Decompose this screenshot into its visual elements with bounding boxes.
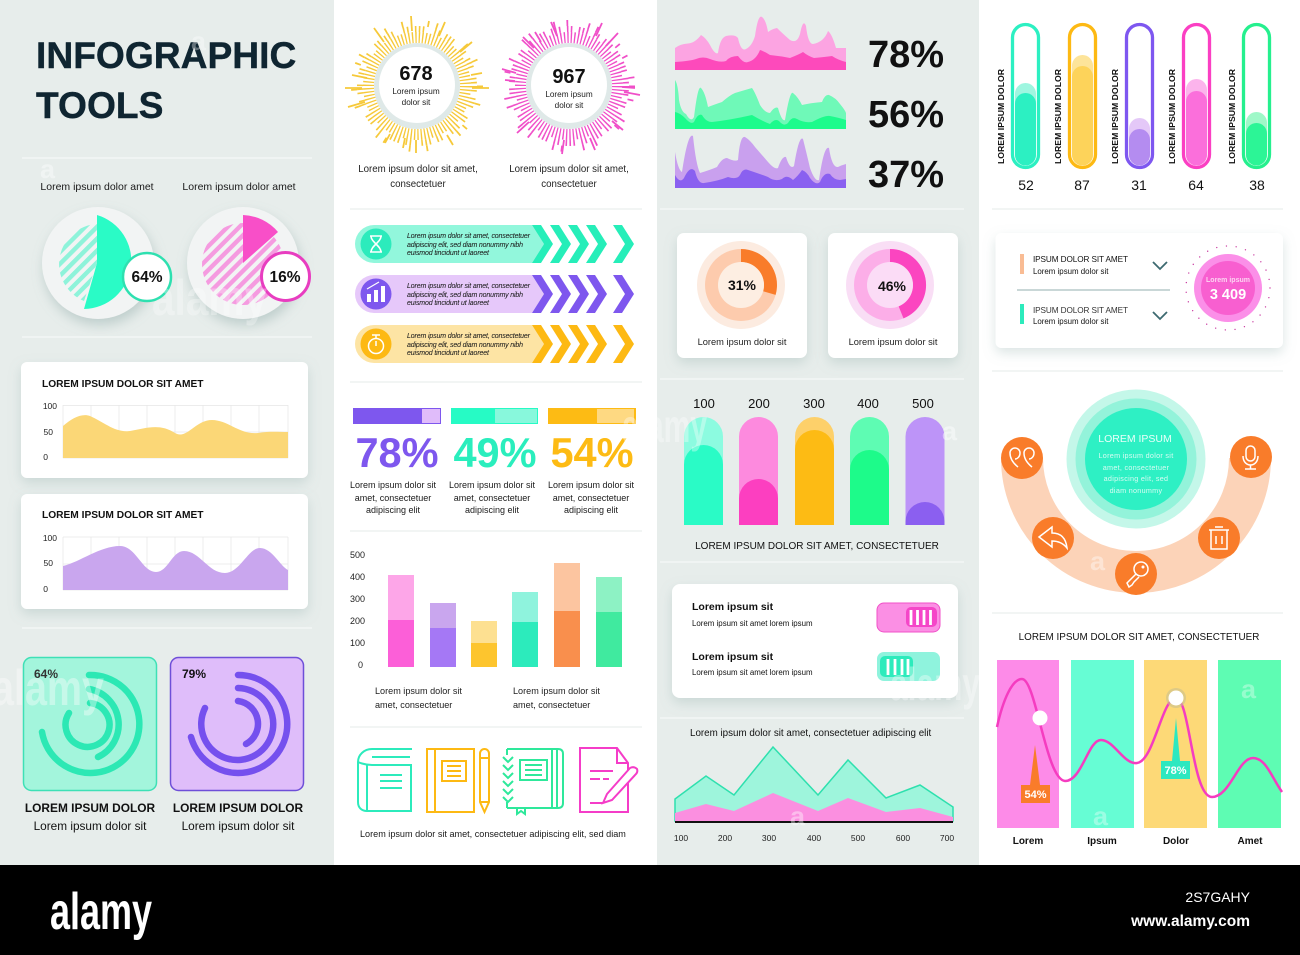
rounded column chart: LOREM IPSUM DOLOR SIT AMET, CONSECTETUER	[695, 541, 939, 552]
card: purple area chart: 50	[44, 558, 53, 568]
percent stat 78: adipiscing elit	[366, 505, 421, 515]
vertical gauge 87: 87	[1074, 177, 1090, 193]
vertical gauge 64	[1167, 24, 1210, 193]
vertical gauge 52: LOREM IPSUM DOLOR	[996, 68, 1006, 164]
card: yellow area chart: 100	[43, 401, 57, 411]
curve column chart: Dolor	[1163, 836, 1189, 847]
wave chart: pink 78 percent	[675, 17, 944, 76]
watermarks: a	[942, 416, 958, 446]
stacked bar chart: amet, consectetuer	[375, 700, 452, 710]
rounded column chart: 100	[693, 396, 715, 411]
percent stat 54: Lorem ipsum dolor sit	[548, 480, 635, 490]
pie chart 64 percent	[42, 207, 171, 319]
card: toggles: Lorem ipsum sit amet lorem ipsum	[692, 619, 813, 628]
toggle: teal	[877, 652, 940, 681]
card: purple area chart: 100	[43, 533, 57, 543]
watermarks: a	[1090, 546, 1106, 576]
vertical gauge 31: LOREM IPSUM DOLOR	[1110, 68, 1120, 164]
curve column chart: Lorem	[1013, 836, 1043, 847]
mountain area chart	[674, 728, 954, 843]
watermarks: a	[40, 154, 56, 184]
stacked bar chart: Lorem ipsum dolor sit	[375, 686, 462, 696]
icon: reply	[1032, 517, 1074, 559]
title	[36, 34, 296, 126]
radial card captions: LOREM IPSUM DOLOR	[25, 801, 155, 815]
mountain area chart: 400	[807, 833, 821, 843]
sunburst gauge 678: 678	[399, 63, 433, 85]
icons caption: Lorem ipsum dolor sit amet, consectetuer adipiscing elit, sed diam	[360, 829, 626, 839]
percent stat 54: adipiscing elit	[564, 505, 619, 515]
stacked bar chart: 0	[358, 660, 363, 670]
sunburst gauge 967: 967	[552, 66, 586, 88]
radial card captions: Lorem ipsum dolor sit	[182, 819, 295, 833]
percent stat 49: 49%	[453, 429, 537, 476]
icon: trash	[1198, 517, 1240, 559]
card: yellow area chart: LOREM IPSUM DOLOR SIT AMET	[42, 379, 204, 390]
percent stat 78: Lorem ipsum dolor sit	[350, 480, 437, 490]
central teal circle: amet, consectetuer	[1103, 463, 1170, 472]
watermarks: alamy	[890, 658, 980, 710]
watermarks: a	[1241, 674, 1257, 704]
card: dropdown list and counter: Lorem ipsum dolor sit	[1033, 267, 1109, 276]
stacked bar chart: 400	[350, 572, 365, 582]
vertical gauge 38	[1227, 24, 1270, 193]
stacked bar chart: 100	[350, 638, 365, 648]
card: yellow area chart: 0	[43, 452, 48, 462]
arrow bar: yellow: adipiscing elit, sed diam nonummy nibh	[407, 342, 523, 349]
rounded column chart: 500	[912, 396, 934, 411]
percent stat 78: amet, consectetuer	[355, 493, 431, 503]
watermarks: a	[191, 26, 207, 56]
central teal circle: diam nonummy	[1110, 486, 1162, 495]
wave chart: green 56 percent: 56%	[868, 94, 944, 136]
watermarks: alamy	[622, 400, 707, 452]
callout 78 percent	[1161, 718, 1190, 779]
rounded column chart: 400	[857, 396, 879, 411]
icon: book	[358, 749, 412, 811]
sunburst captions: consectetuer	[541, 179, 598, 190]
icon: key	[1115, 553, 1157, 595]
icon: microphone	[1230, 436, 1272, 478]
footer bar	[0, 865, 1300, 955]
mountain area chart: 100	[674, 833, 688, 843]
panel: teal radial card	[24, 658, 156, 790]
icon: quotes	[1001, 437, 1043, 479]
donut card 46 percent: 46%	[878, 278, 907, 294]
arrow bar: yellow: euismod tincidunt ut laoreet	[407, 350, 490, 357]
vertical gauge 31	[1110, 24, 1152, 193]
mountain area chart: 500	[851, 833, 865, 843]
percent stat 78	[350, 408, 441, 515]
footer bar: alamy	[50, 883, 152, 941]
vertical gauge 64: LOREM IPSUM DOLOR	[1167, 68, 1177, 164]
callout 78 percent: 78%	[1164, 765, 1187, 777]
arrow bar: purple: Lorem ipsum dolor sit amet, consectetuer	[407, 283, 531, 290]
card: dropdown list and counter: IPSUM DOLOR SIT AMET	[1033, 255, 1128, 264]
curve column chart: LOREM IPSUM DOLOR SIT AMET, CONSECTETUER	[1019, 632, 1259, 643]
stacked bar chart: 200	[350, 616, 365, 626]
watermarks: a	[790, 801, 806, 831]
mountain area chart: 700	[940, 833, 954, 843]
donut card 31 percent	[677, 233, 807, 358]
donut card 46 percent: Lorem ipsum dolor sit	[849, 337, 938, 347]
card: dropdown list and counter: IPSUM DOLOR SIT AMET	[1033, 306, 1128, 315]
wave chart: pink 78 percent: 78%	[868, 34, 944, 76]
watermarks: alamy	[152, 270, 267, 326]
card: toggles: Lorem ipsum sit	[692, 651, 774, 663]
arrow bar: yellow: Lorem ipsum dolor sit amet, consectetuer	[407, 333, 531, 340]
central teal circle	[1066, 390, 1206, 528]
percent stat 49: Lorem ipsum dolor sit	[449, 480, 536, 490]
wave chart: purple 37 percent	[675, 136, 944, 196]
radial card captions: LOREM IPSUM DOLOR	[173, 801, 303, 815]
vertical gauge 64: 64	[1188, 177, 1204, 193]
sunburst captions: Lorem ipsum dolor sit amet,	[509, 164, 629, 175]
sunburst captions: Lorem ipsum dolor sit amet,	[358, 164, 478, 175]
callout 54 percent	[1021, 745, 1050, 803]
pie caption left: Lorem ipsum dolor amet	[40, 181, 154, 193]
central teal circle: adipiscing elit, sed	[1104, 474, 1168, 483]
rounded column chart	[684, 396, 944, 552]
panel: purple radial card	[170, 658, 304, 790]
card: purple area chart: 0	[43, 584, 48, 594]
arrow bar: purple	[355, 275, 634, 313]
pie chart 16 percent: 16%	[269, 269, 301, 286]
percent stat 78: 78%	[355, 429, 439, 476]
sunburst captions	[358, 164, 629, 190]
sunburst gauge 967: Lorem ipsum	[545, 90, 593, 99]
title: INFOGRAPHIC	[36, 34, 296, 76]
sunburst gauge 678: Lorem ipsum	[392, 87, 440, 96]
icon: document and pen	[580, 748, 637, 812]
arrow bar: purple: adipiscing elit, sed diam nonummy nibh	[407, 292, 523, 299]
mountain area chart: 600	[896, 833, 910, 843]
vertical gauge 52	[996, 24, 1038, 193]
mountain area chart: 300	[762, 833, 776, 843]
arrow bar: yellow	[355, 325, 634, 363]
card: dropdown list and counter: Lorem ipsum dolor sit	[1033, 317, 1109, 326]
title: TOOLS	[36, 84, 163, 126]
donut card 31 percent: 31%	[728, 277, 757, 293]
footer bar: 2S7GAHY	[1185, 889, 1251, 905]
sunburst gauge 678	[345, 16, 489, 153]
wave chart: green 56 percent	[675, 80, 944, 136]
counter circle: Lorem ipsum	[1206, 277, 1250, 284]
percent stat 49	[449, 408, 538, 515]
rounded column chart: 200	[748, 396, 770, 411]
stacked bar chart: amet, consectetuer	[513, 700, 590, 710]
curve column chart: Amet	[1237, 836, 1263, 847]
vertical gauge 87: LOREM IPSUM DOLOR	[1053, 68, 1063, 164]
mountain area chart: 200	[718, 833, 732, 843]
wave chart: purple 37 percent: 37%	[868, 154, 944, 196]
stacked bar chart	[350, 550, 622, 710]
pie caption right: Lorem ipsum dolor amet	[182, 181, 296, 193]
pie chart 64 percent: 64%	[131, 269, 163, 286]
percent stat 54	[548, 408, 636, 515]
callout 54 percent: 54%	[1024, 789, 1047, 801]
arrow bar: purple: euismod tincidunt ut laoreet	[407, 300, 490, 307]
stacked bar chart: 500	[350, 550, 365, 560]
card: purple area chart	[21, 494, 308, 609]
vertical gauge 52: 52	[1018, 177, 1034, 193]
panel: teal radial card: 64%	[34, 667, 58, 681]
percent stat 49: amet, consectetuer	[454, 493, 530, 503]
card: dropdown list and counter	[996, 233, 1283, 348]
curve column chart	[997, 632, 1282, 847]
vertical gauge 38: 38	[1249, 177, 1265, 193]
vertical gauge 31: 31	[1131, 177, 1147, 193]
footer bar: www.alamy.com	[1130, 913, 1250, 930]
central teal circle: LOREM IPSUM	[1098, 433, 1172, 445]
arrow bar: teal: Lorem ipsum dolor sit amet, consectetuer	[407, 233, 531, 240]
vertical gauge 87	[1053, 24, 1096, 193]
arrow bar: teal	[355, 225, 634, 263]
counter circle	[1186, 246, 1270, 330]
card: toggles: Lorem ipsum sit amet lorem ipsum	[692, 668, 813, 677]
sunburst gauge 967	[502, 22, 640, 154]
radial card captions	[25, 801, 303, 833]
card: toggles	[672, 584, 958, 698]
stacked bar chart: 300	[350, 594, 365, 604]
central teal circle: Lorem ipsum dolor sit	[1098, 451, 1174, 460]
percent stat 49: adipiscing elit	[465, 505, 520, 515]
curve column chart: Ipsum	[1087, 836, 1117, 847]
vertical gauge 38: LOREM IPSUM DOLOR	[1227, 68, 1237, 164]
radial card captions: Lorem ipsum dolor sit	[34, 819, 147, 833]
toggle: pink	[877, 603, 940, 632]
arrow bar: teal: adipiscing elit, sed diam nonummy nibh	[407, 242, 523, 249]
sunburst captions: consectetuer	[390, 179, 447, 190]
arrow bar: teal: euismod tincidunt ut laoreet	[407, 250, 490, 257]
mountain area chart: Lorem ipsum dolor sit amet, consectetuer adipiscing elit	[690, 728, 932, 739]
rounded column chart: 300	[803, 396, 825, 411]
panel: purple radial card: 79%	[182, 667, 206, 681]
pie chart 16 percent	[187, 207, 310, 319]
counter circle: 3 409	[1210, 287, 1246, 303]
watermarks: a	[1093, 801, 1109, 831]
donut card 46 percent	[828, 233, 958, 358]
card: toggles: Lorem ipsum sit	[692, 601, 774, 613]
card: yellow area chart	[21, 362, 308, 478]
percent stat 54: amet, consectetuer	[553, 493, 629, 503]
stacked bar chart: Lorem ipsum dolor sit	[513, 686, 600, 696]
sunburst gauge 678: dolor sit	[402, 98, 431, 107]
icon: spiral notebook	[503, 749, 563, 814]
semicircle menu	[1001, 390, 1272, 595]
percent stat 54: 54%	[550, 429, 634, 476]
panel: pie charts	[40, 181, 310, 319]
card: yellow area chart: 50	[44, 427, 53, 437]
icon: notebook and pencil	[427, 749, 489, 812]
card: purple area chart: LOREM IPSUM DOLOR SIT AMET	[42, 510, 204, 521]
sunburst gauge 967: dolor sit	[555, 101, 584, 110]
donut card 31 percent: Lorem ipsum dolor sit	[698, 337, 787, 347]
